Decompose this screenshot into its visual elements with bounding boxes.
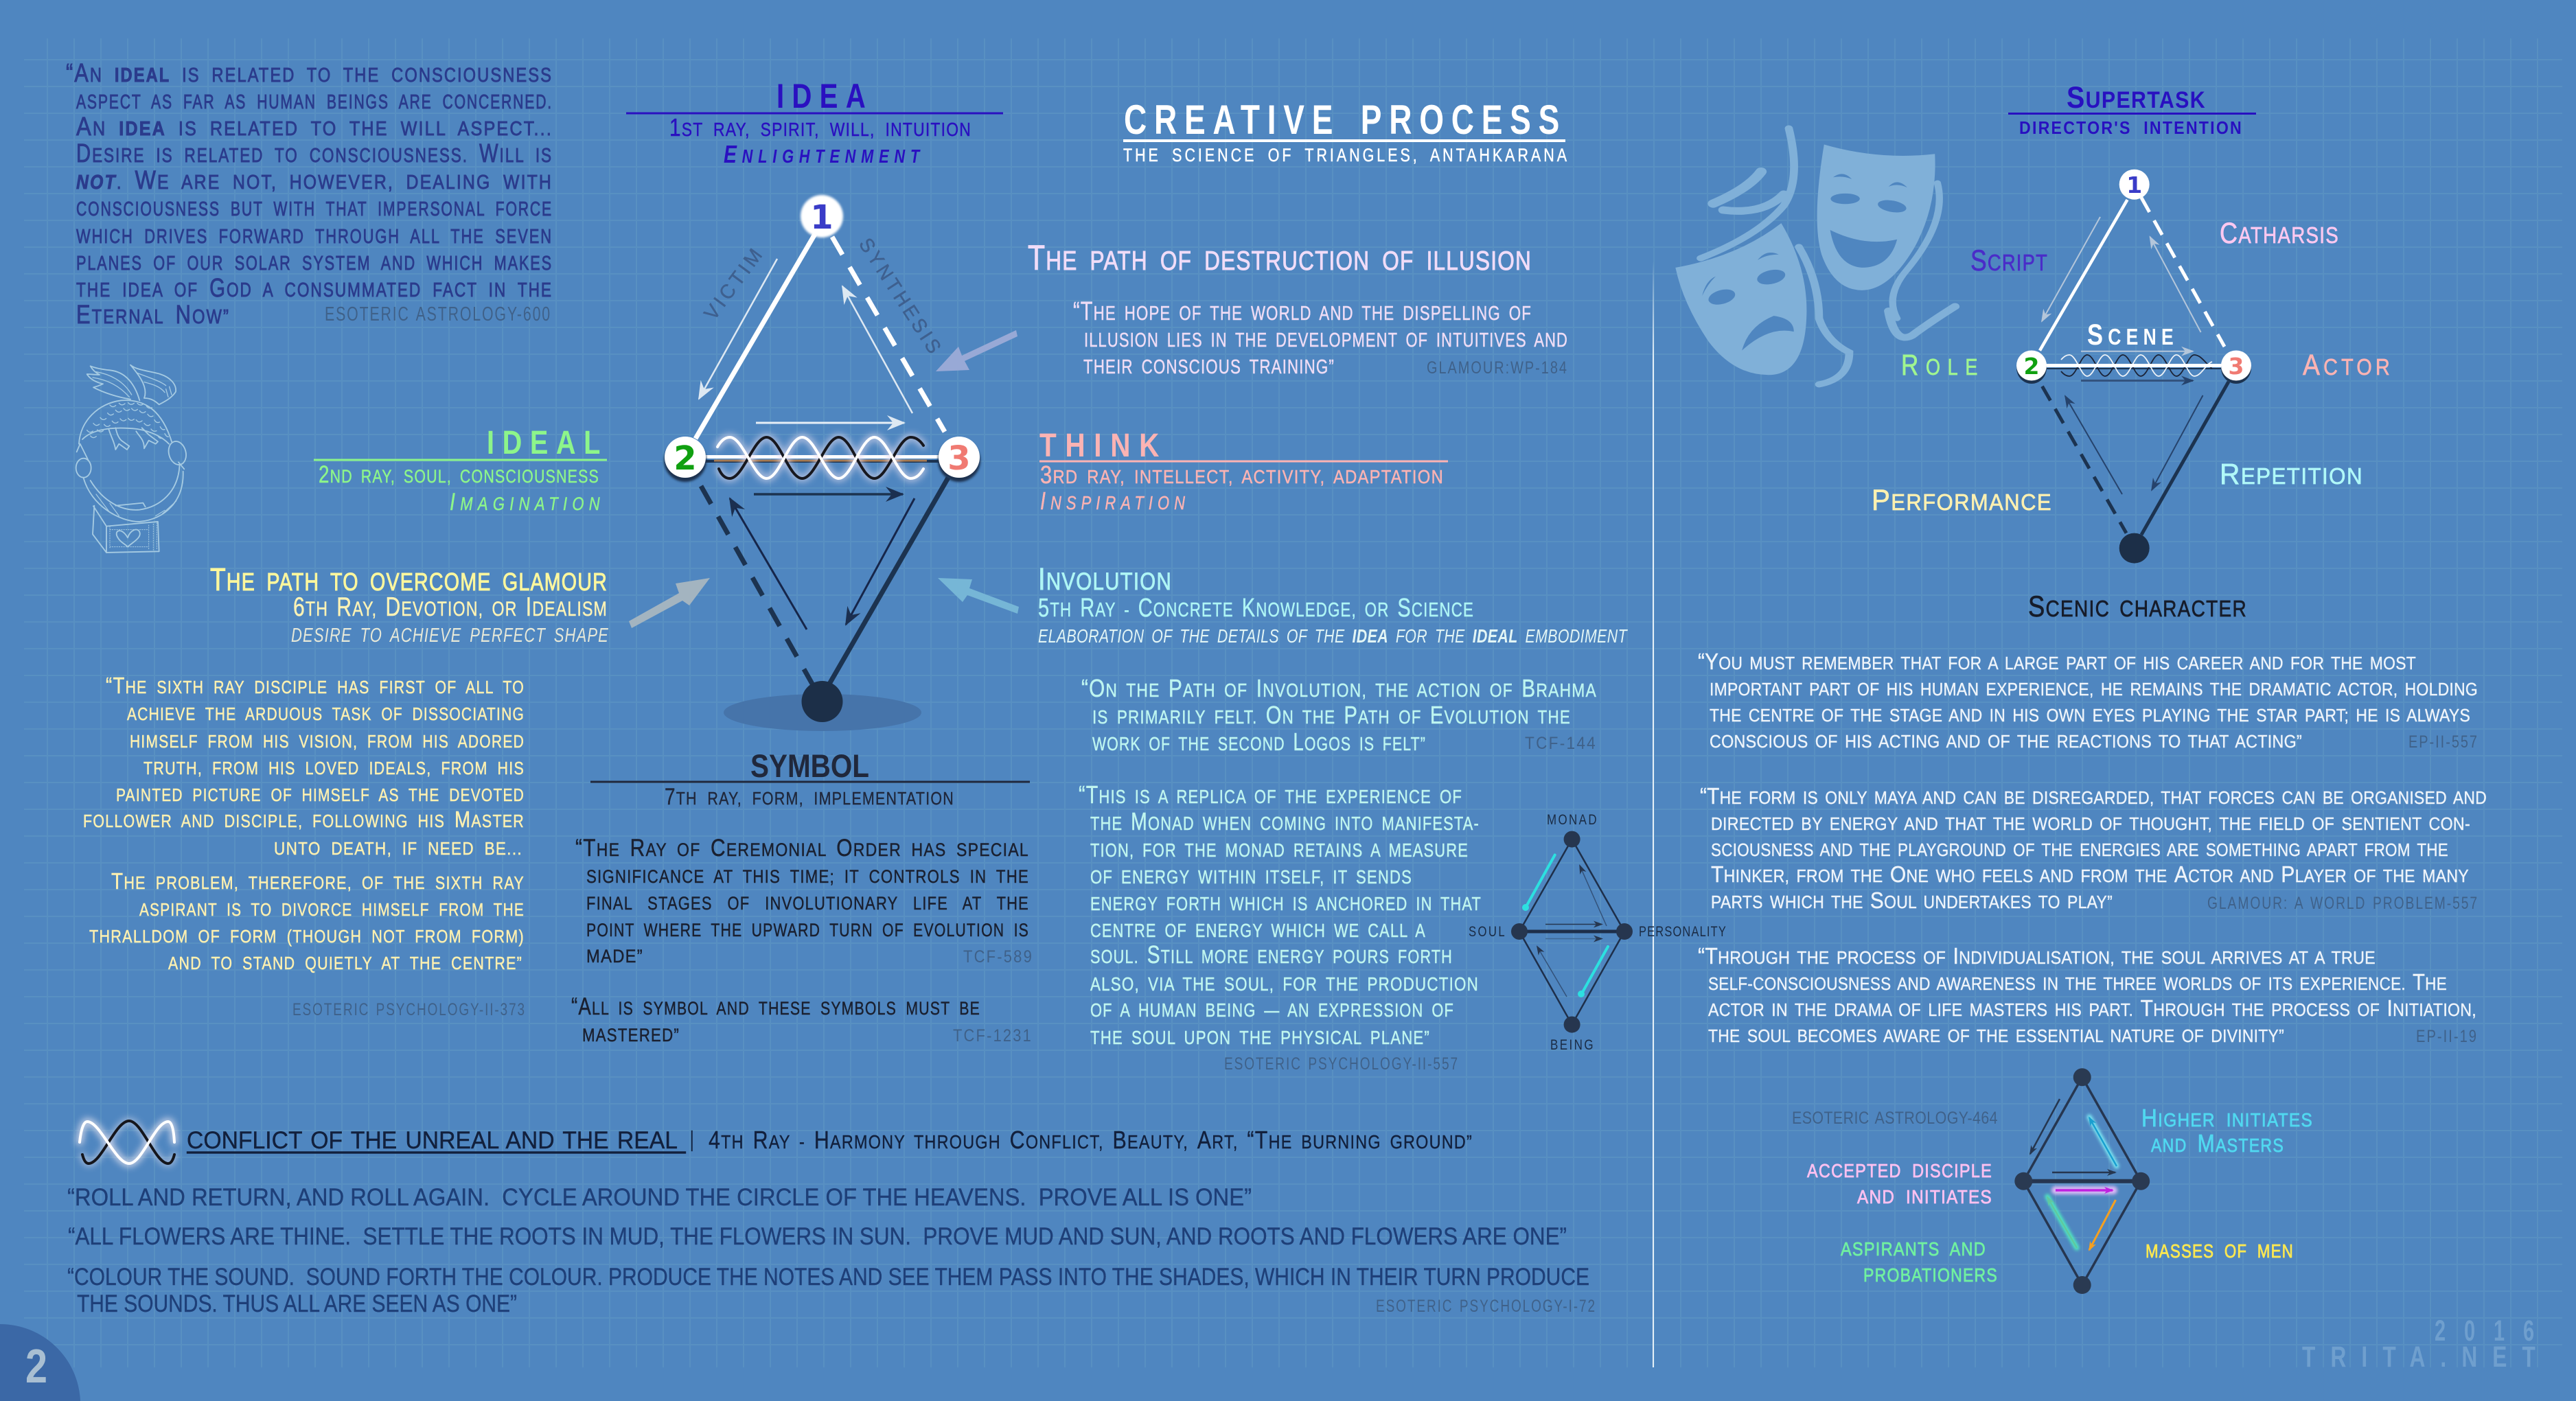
text block: path of involution quote xyxy=(1081,674,1597,756)
text block: ceremonial order quote: “ALL IS SYMBOL AND THESE SYMBOLS MUST BE xyxy=(571,993,980,1020)
text block: individualisation quote: EP-II-19 xyxy=(2416,1027,2478,1046)
text block: sixth ray quote: ASPIRANT IS TO DIVORCE HIMSELF FROM THE xyxy=(139,901,525,920)
diagram: disciples diamond: AND MASTERS xyxy=(2151,1129,2284,1157)
diagram: monad soul personality being: BEING xyxy=(1550,1037,1595,1053)
text block: monad replica quote: OF A HUMAN BEING — AN EXPRESSION OF xyxy=(1090,999,1454,1021)
text block: roll and return quotes xyxy=(67,1184,1596,1317)
heading: symbol xyxy=(590,748,1030,810)
text block: ceremonial order quote: FINAL STAGES OF INVOLUTIONARY LIFE AT THE xyxy=(586,893,1029,914)
text block: sixth ray quote: HIMSELF FROM HIS VISION, FROM HIS ADORED xyxy=(130,732,525,752)
node 1 xyxy=(801,195,843,238)
heading: supertask: DIRECTOR'S INTENTION xyxy=(2019,117,2243,138)
text block: monad replica quote: ESOTERIC PSYCHOLOGY-II-557 xyxy=(1224,1054,1459,1074)
heading: path of destruction: THE PATH OF DESTRUCTION OF ILLUSION xyxy=(1028,238,1532,277)
diagram: disciples diamond: AND INITIATES xyxy=(1857,1186,1992,1207)
text block: sixth ray quote: AND TO STAND QUIETLY AT THE CENTRE” xyxy=(168,954,522,973)
diagram: monad soul personality being xyxy=(1469,812,1727,1053)
text block: individualisation quote: THE SOUL BECOMES AWARE OF THE ESSENTIAL NATURE OF DIVINITY” xyxy=(1708,1027,2284,1046)
text block: illusion quote: GLAMOUR:WP-184 xyxy=(1427,358,1568,378)
vertical divider xyxy=(1653,261,1654,1367)
heading: path to overcome glamour: 6TH RAY, DEVOTION, OR IDEALISM xyxy=(293,592,608,622)
text block: ceremonial order quote xyxy=(571,835,1033,1045)
node 3: 3 xyxy=(947,439,971,478)
sides of diamond xyxy=(695,234,948,685)
page number badge: 2 xyxy=(25,1339,47,1393)
text block: ceremonial order quote: MASTERED” xyxy=(582,1025,680,1045)
text block: roll and return quotes: “COLOUR THE SOUND. SOUND FORTH THE COLOUR. PRODUCE THE NOTES AND SEE THEM PASS INTO THE SHADES, WHICH IN THEIR TURN PRODUCE xyxy=(67,1264,1589,1290)
text block: monad replica quote: THE SOUL UPON THE PHYSICAL PLANE” xyxy=(1090,1027,1430,1048)
text block: ideal quote: ETERNAL NOW” xyxy=(76,300,230,329)
text block: ceremonial order quote: POINT WHERE THE UPWARD TURN OF EVOLUTION IS xyxy=(586,920,1029,940)
heading: conflict of the unreal and the real: 4TH RAY - HARMONY THROUGH CONFLICT, BEAUTY, ART, “THE BURNING GROUND” xyxy=(709,1126,1473,1154)
text block: sixth ray quote: FOLLOWER AND DISCIPLE, FOLLOWING HIS MASTER xyxy=(83,807,525,833)
heading: path to overcome glamour: THE PATH TO OVERCOME GLAMOUR xyxy=(210,561,608,597)
heading: idea: IDEA xyxy=(777,77,873,115)
heading: conflict of the unreal and the real xyxy=(187,1126,1473,1154)
text block: ideal quote: WHICH DRIVES FORWARD THROUGH ALL THE SEVEN xyxy=(76,226,553,248)
text block: path of involution quote: IS PRIMARILY FELT. ON THE PATH OF EVOLUTION THE xyxy=(1092,701,1571,729)
text block: monad replica quote: TION, FOR THE MONAD RETAINS A MEASURE xyxy=(1090,840,1469,861)
text block: roll and return quotes: “ROLL AND RETURN, AND ROLL AGAIN. CYCLE AROUND THE CIRCLE OF THE HEAVENS. PROVE ALL IS ONE” xyxy=(67,1184,1252,1211)
heading: involution: 5TH RAY - CONCRETE KNOWLEDGE, OR SCIENCE xyxy=(1038,593,1474,622)
nodes: 3 xyxy=(2229,353,2244,380)
text block: individualisation quote: “THROUGH THE PROCESS OF INDIVIDUALISATION, THE SOUL ARRIVES AT A TRUE xyxy=(1698,944,2376,969)
heading: ideal xyxy=(314,425,608,516)
text block: monad replica quote: CENTRE OF ENERGY WHICH WE CALL A xyxy=(1090,920,1426,941)
text block: roll and return quotes: ESOTERIC PSYCHOLOGY-I-72 xyxy=(1376,1297,1596,1316)
diagram: monad soul personality being: PERSONALITY xyxy=(1639,924,1727,940)
text block: form is maya quote: DIRECTED BY ENERGY AND THAT THE WORLD OF THOUGHT, THE FIELD OF SENTIENT CON- xyxy=(1711,815,2470,834)
labels: PERFORMANCE xyxy=(1872,484,2052,517)
text block: individualisation quote: ACTOR IN THE DRAMA OF LIFE MASTERS HIS PART. THROUGH THE PROCESS OF INITIATION, xyxy=(1708,996,2476,1021)
heading: involution: INVOLUTION xyxy=(1038,561,1172,597)
heading: path to overcome glamour xyxy=(210,561,609,647)
labels: ACTOR xyxy=(2303,349,2393,382)
diagram: monad soul personality being: SOUL xyxy=(1469,924,1506,940)
labels: ESOTERIC ASTROLOGY-464 xyxy=(1792,1109,1998,1128)
text block: sixth ray quote: “THE SIXTH RAY DISCIPLE HAS FIRST OF ALL TO xyxy=(106,673,525,699)
text block: ceremonial order quote: “THE RAY OF CEREMONIAL ORDER HAS SPECIAL xyxy=(575,835,1029,861)
text block: ideal quote: ASPECT AS FAR AS HUMAN BEINGS ARE CONCERNED. xyxy=(76,91,553,113)
nodes: 1 xyxy=(2126,172,2142,198)
arrows xyxy=(2042,217,2203,494)
text block: sixth ray quote: ESOTERIC PSYCHOLOGY-II-373 xyxy=(292,1000,526,1019)
title xyxy=(1123,97,1569,165)
title: CREATIVE PROCESS xyxy=(1124,97,1567,143)
diagram: main diamond xyxy=(664,195,980,731)
nodes xyxy=(2016,170,2251,564)
text block: dramatic actor quote: “YOU MUST REMEMBER THAT FOR A LARGE PART OF HIS CAREER AND FOR THE MOST xyxy=(1698,649,2416,675)
text block: ideal quote: NOT. WE ARE NOT, HOWEVER, DEALING WITH xyxy=(76,165,553,194)
text block: roll and return quotes: THE SOUNDS. THUS ALL ARE SEEN AS ONE” xyxy=(77,1290,517,1317)
labels: CATHARSIS xyxy=(2220,217,2339,250)
text block: illusion quote: THEIR CONSCIOUS TRAINING” xyxy=(1083,356,1335,378)
text block: ideal quote: CONSCIOUSNESS BUT WITH THAT IMPERSONAL FORCE xyxy=(76,198,553,220)
text block: roll and return quotes: “ALL FLOWERS ARE THINE. SETTLE THE ROOTS IN MUD, THE FLOWERS IN SUN. PROVE MUD AND SUN, AND ROOTS AND FLOWERS ARE ONE” xyxy=(68,1223,1567,1250)
heading: path to overcome glamour: DESIRE TO ACHIEVE PERFECT SHAPE xyxy=(291,625,609,647)
text block: dramatic actor quote: CONSCIOUS OF HIS ACTING AND OF THE REACTIONS TO THAT ACTING” xyxy=(1710,732,2302,752)
credit xyxy=(2302,1315,2553,1374)
symbol node xyxy=(802,681,843,722)
text block: ideal quote: PLANES OF OUR SOLAR SYSTEM AND WHICH MAKES xyxy=(76,253,553,275)
heading: symbol: 7TH RAY, FORM, IMPLEMENTATION xyxy=(665,784,954,810)
diagram: disciples diamond: ACCEPTED DISCIPLE xyxy=(1807,1160,1992,1181)
heading: involution: ELABORATION OF THE DETAILS OF THE IDEA FOR THE IDEAL EMBODIMENT xyxy=(1038,625,1628,647)
text block: form is maya quote: GLAMOUR: A WORLD PROBLEM-557 xyxy=(2207,894,2479,913)
diagram: disciples diamond: HIGHER INITIATES xyxy=(2141,1104,2313,1132)
text block: monad replica quote: SOUL. STILL MORE ENERGY POURS FORTH xyxy=(1090,940,1453,969)
text block: ideal quote: THE IDEA OF GOD A CONSUMMATED FACT IN THE xyxy=(76,273,553,302)
heading: ideal: 2ND RAY, SOUL, CONSCIOUSNESS xyxy=(319,461,599,488)
text block: ideal quote xyxy=(66,58,553,329)
text block: ceremonial order quote: MADE” xyxy=(586,946,643,966)
heading: think xyxy=(1039,428,1448,515)
text block: form is maya quote xyxy=(1700,784,2487,914)
heading: think: 3RD RAY, INTELLECT, ACTIVITY, ADAPTATION xyxy=(1040,461,1444,489)
labels: ROLE xyxy=(1901,349,1985,382)
text block: dramatic actor quote xyxy=(1698,649,2479,752)
text block: monad replica quote: ALSO, VIA THE SOUL, FOR THE PRODUCTION xyxy=(1090,973,1479,995)
text block: individualisation quote: SELF-CONSCIOUSNESS AND AWARENESS IN THE THREE WORLDS OF ITS EXPERIENCE. THE xyxy=(1708,970,2447,995)
node 2: 2 xyxy=(674,439,697,478)
text block: ideal quote: DESIRE IS RELATED TO CONSCIOUSNESS. WILL IS xyxy=(76,139,553,167)
text block: ceremonial order quote: TCF-589 xyxy=(963,947,1033,966)
text block: monad replica quote xyxy=(1079,780,1482,1074)
text block: form is maya quote: PARTS WHICH THE SOUL UNDERTAKES TO PLAY” xyxy=(1711,888,2113,914)
title: THE SCIENCE OF TRIANGLES, ANTAHKARANA xyxy=(1123,145,1569,165)
glow strokes xyxy=(2047,1117,2117,1248)
arrow: from involution xyxy=(938,578,1019,614)
node 1: 1 xyxy=(810,198,833,237)
text block: sixth ray quote: PAINTED PICTURE OF HIMSELF AS THE DEVOTED xyxy=(116,786,525,805)
arrow: from glamour path xyxy=(629,578,710,628)
heading: involution xyxy=(1038,561,1628,647)
text block: path of involution quote: WORK OF THE SECOND LOGOS IS FELT” xyxy=(1092,728,1426,756)
waves: unreal and real xyxy=(717,437,923,478)
labels: SCENE xyxy=(2087,319,2178,351)
text block: individualisation quote xyxy=(1698,944,2478,1046)
icon: winged ouroboros dragon on heart pedestal xyxy=(76,365,189,553)
arrow: to destruction path xyxy=(936,330,1017,371)
label: synthesis: SYNTHESIS xyxy=(854,234,947,360)
text block: ceremonial order quote: SIGNIFICANCE AT THIS TIME; IT CONTROLS IN THE xyxy=(586,866,1029,887)
labels: REPETITION xyxy=(2220,458,2363,491)
text block: ceremonial order quote: TCF-1231 xyxy=(953,1026,1033,1045)
text block: path of involution quote: “ON THE PATH OF INVOLUTION, THE ACTION OF BRAHMA xyxy=(1081,674,1597,702)
text block: monad replica quote: THE MONAD WHEN COMING INTO MANIFESTA- xyxy=(1090,807,1480,835)
labels: SCRIPT xyxy=(1970,244,2048,277)
arrows xyxy=(2030,1099,2117,1250)
text block: dramatic actor quote: IMPORTANT PART OF HIS HUMAN EXPERIENCE, HE REMAINS THE DRAMATIC ACTOR, HOLDING xyxy=(1710,680,2478,699)
text block: sixth ray quote: THE PROBLEM, THEREFORE, OF THE SIXTH RAY xyxy=(111,869,525,894)
diagram: disciples diamond: PROBATIONERS xyxy=(1863,1264,1998,1286)
diagram: disciples diamond xyxy=(1792,1068,2313,1294)
diagram: monad soul personality being: MONAD xyxy=(1547,812,1598,828)
text block: sixth ray quote: UNTO DEATH, IF NEED BE... xyxy=(274,840,522,859)
text block: monad replica quote: OF ENERGY WITHIN ITSELF, IT SENDS xyxy=(1090,866,1412,888)
heading: ideal: IMAGINATION xyxy=(450,489,605,516)
heading: symbol: SYMBOL xyxy=(750,748,869,784)
arrows along sides xyxy=(699,259,915,629)
text block: form is maya quote: SCIOUSNESS AND THE PLAYGROUND OF THE ENERGIES ARE SOMETHING APART FROM THE xyxy=(1711,841,2448,860)
diagram: theatre diamond xyxy=(1872,170,2393,623)
heading: supertask: SUPERTASK xyxy=(2067,81,2206,115)
node 3 xyxy=(938,437,980,482)
text block: dramatic actor quote: EP-II-557 xyxy=(2408,732,2479,752)
labels: SCENIC CHARACTER xyxy=(2028,590,2247,623)
heading: idea: ENLIGHTENMENT xyxy=(724,140,925,168)
icon: conflict double wave xyxy=(80,1121,174,1163)
text block: ideal quote: “AN IDEAL IS RELATED TO THE CONSCIOUSNESS xyxy=(66,58,553,87)
heading: supertask xyxy=(2008,81,2256,138)
text block: sixth ray quote xyxy=(83,673,526,1019)
text block: sixth ray quote: ACHIEVE THE ARDUOUS TASK OF DISSOCIATING xyxy=(127,705,525,724)
text block: dramatic actor quote: THE CENTRE OF THE STAGE AND IN HIS OWN EYES PLAYING THE STAR PART; HE IS ALWAYS xyxy=(1710,706,2470,726)
text block: monad replica quote: ENERGY FORTH WHICH IS ANCHORED IN THAT xyxy=(1090,893,1482,914)
text block: illusion quote xyxy=(1073,297,1568,378)
symbol shadow xyxy=(724,694,921,731)
text block: ideal quote: AN IDEA IS RELATED TO THE WILL ASPECT... xyxy=(76,112,553,141)
node 2 xyxy=(664,437,706,482)
text block: sixth ray quote: TRUTH, FROM HIS LOVED IDEALS, FROM HIS xyxy=(143,759,525,778)
text block: illusion quote: “THE HOPE OF THE WORLD AND THE DISPELLING OF xyxy=(1073,297,1532,325)
text block: path of involution quote: TCF-144 xyxy=(1525,734,1597,753)
text block: ideal quote: ESOTERIC ASTROLOGY-600 xyxy=(325,303,551,325)
heading: ideal: IDEAL xyxy=(487,425,608,461)
labels xyxy=(1872,217,2393,623)
heading: idea xyxy=(626,77,1003,168)
text block: illusion quote: ILLUSION LIES IN THE DEVELOPMENT OF INTUITIVES AND xyxy=(1084,329,1568,351)
text block: form is maya quote: THINKER, FROM THE ONE WHO FEELS AND FROM THE ACTOR AND PLAYER OF THE MANY xyxy=(1711,862,2469,888)
small waves xyxy=(2061,355,2212,376)
label: victim: VICTIM xyxy=(700,242,769,324)
page number badge xyxy=(0,1324,80,1401)
heading: idea: 1ST RAY, SPIRIT, WILL, INTUITION xyxy=(669,113,971,141)
text block: form is maya quote: “THE FORM IS ONLY MAYA AND CAN BE DISREGARDED, THAT FORCES CAN BE ORGANISED AND xyxy=(1700,784,2487,809)
heading: think: THINK xyxy=(1039,428,1168,464)
heading: think: INSPIRATION xyxy=(1040,487,1190,515)
text block: monad replica quote: “THIS IS A REPLICA OF THE EXPERIENCE OF xyxy=(1079,780,1462,809)
text block: sixth ray quote: THRALLDOM OF FORM (THOUGH NOT FROM FORM) xyxy=(89,927,525,947)
nodes: 2 xyxy=(2024,353,2039,380)
heading: conflict of the unreal and the real: CONFLICT OF THE UNREAL AND THE REAL xyxy=(187,1127,678,1154)
icon: theatre masks xyxy=(1675,128,1955,384)
diagram: disciples diamond: ASPIRANTS AND xyxy=(1841,1238,1986,1260)
diagram: disciples diamond: MASSES OF MEN xyxy=(2146,1240,2294,1262)
